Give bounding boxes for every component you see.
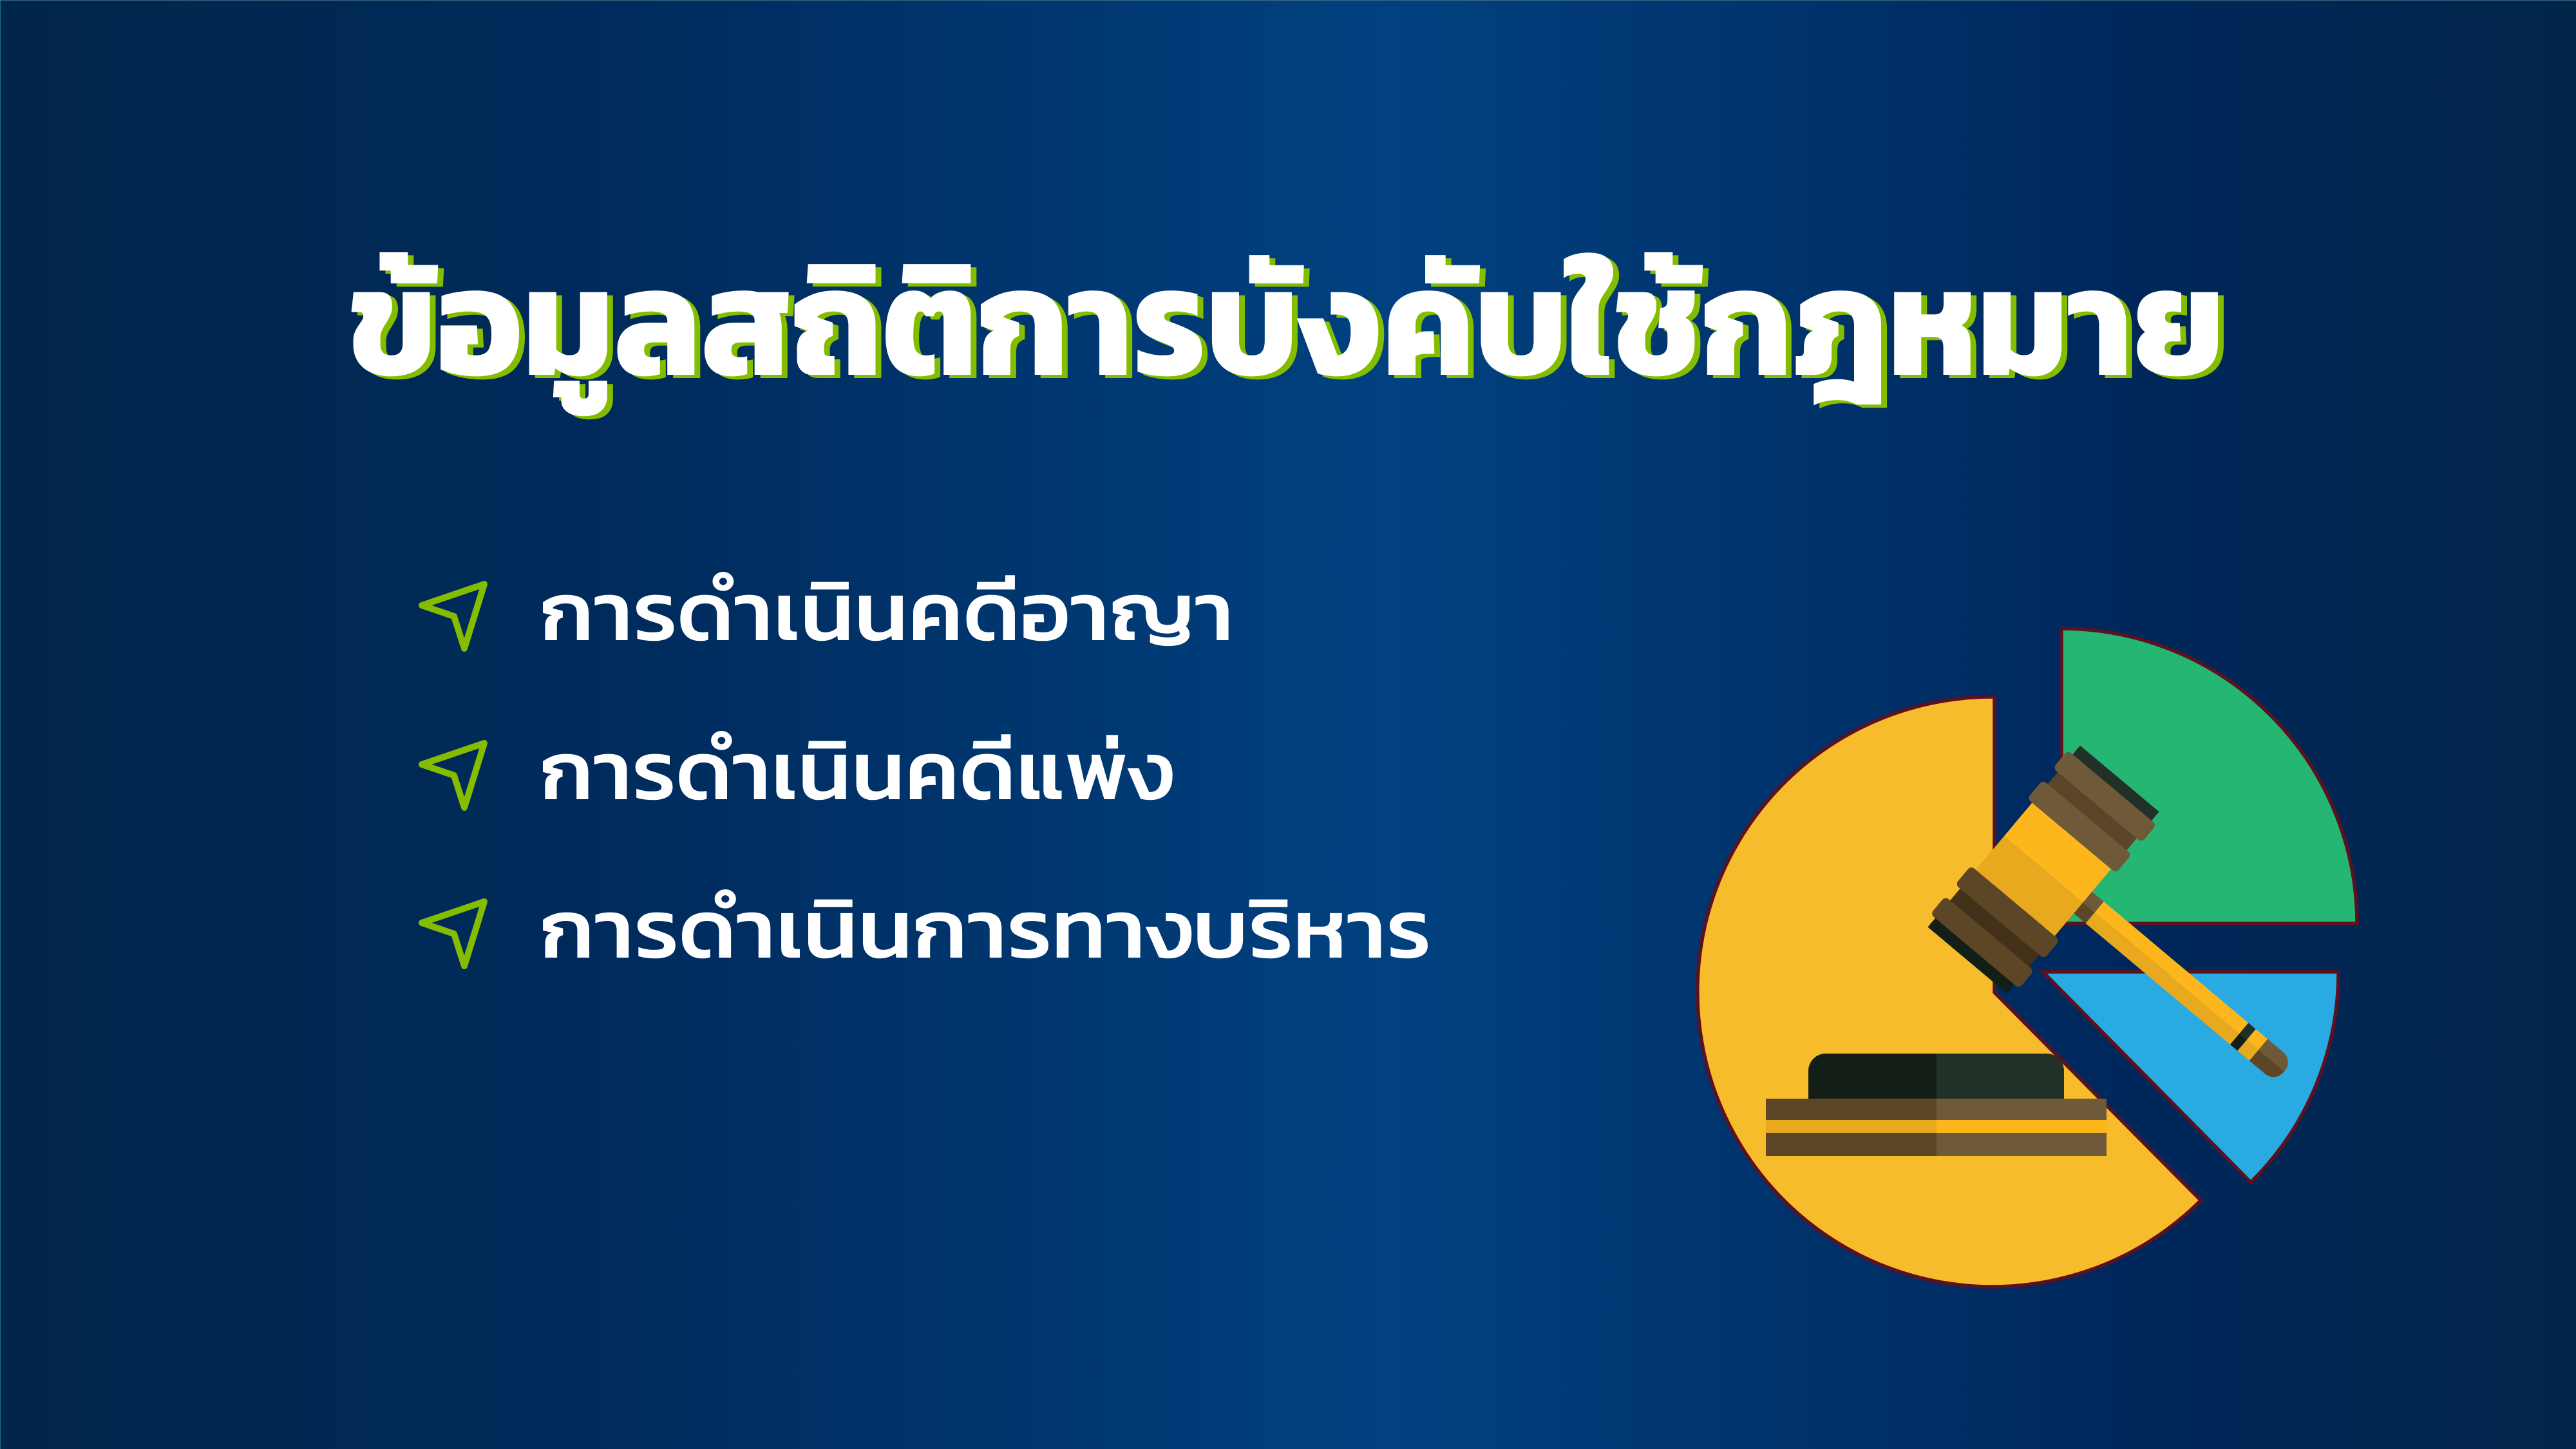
pie slice: green xyxy=(2061,629,2357,923)
head xyxy=(1923,741,2164,998)
title: ข้อมูลสถิติการบังคับใช้กฎหมาย xyxy=(354,210,2230,439)
text: criminal cases: การดำเนินคดีอาญา xyxy=(540,549,1234,673)
pie chart xyxy=(1698,629,2357,1287)
list item: civil cases xyxy=(422,708,1173,832)
icon: arrow xyxy=(422,743,484,808)
gavel base xyxy=(1766,1054,2107,1156)
text: administrative proceedings: การดำเนินการทางบริหาร xyxy=(540,867,1431,990)
bullet list xyxy=(422,549,1431,990)
illustration: pie chart with gavel xyxy=(1698,629,2360,1287)
icon: arrow xyxy=(422,902,484,966)
list item: criminal cases xyxy=(422,549,1234,673)
list item: administrative proceedings xyxy=(422,867,1431,990)
icon: arrow xyxy=(422,584,484,649)
gavel hammer xyxy=(1923,741,2360,1162)
handle xyxy=(2074,892,2293,1083)
pie slice: yellow xyxy=(1698,697,2201,1287)
pie slice: blue xyxy=(2043,972,2338,1182)
title: ข้อมูลสถิติการบังคับใช้กฎหมาย xyxy=(348,207,2224,436)
text: civil cases: การดำเนินคดีแพ่ง xyxy=(540,708,1173,832)
